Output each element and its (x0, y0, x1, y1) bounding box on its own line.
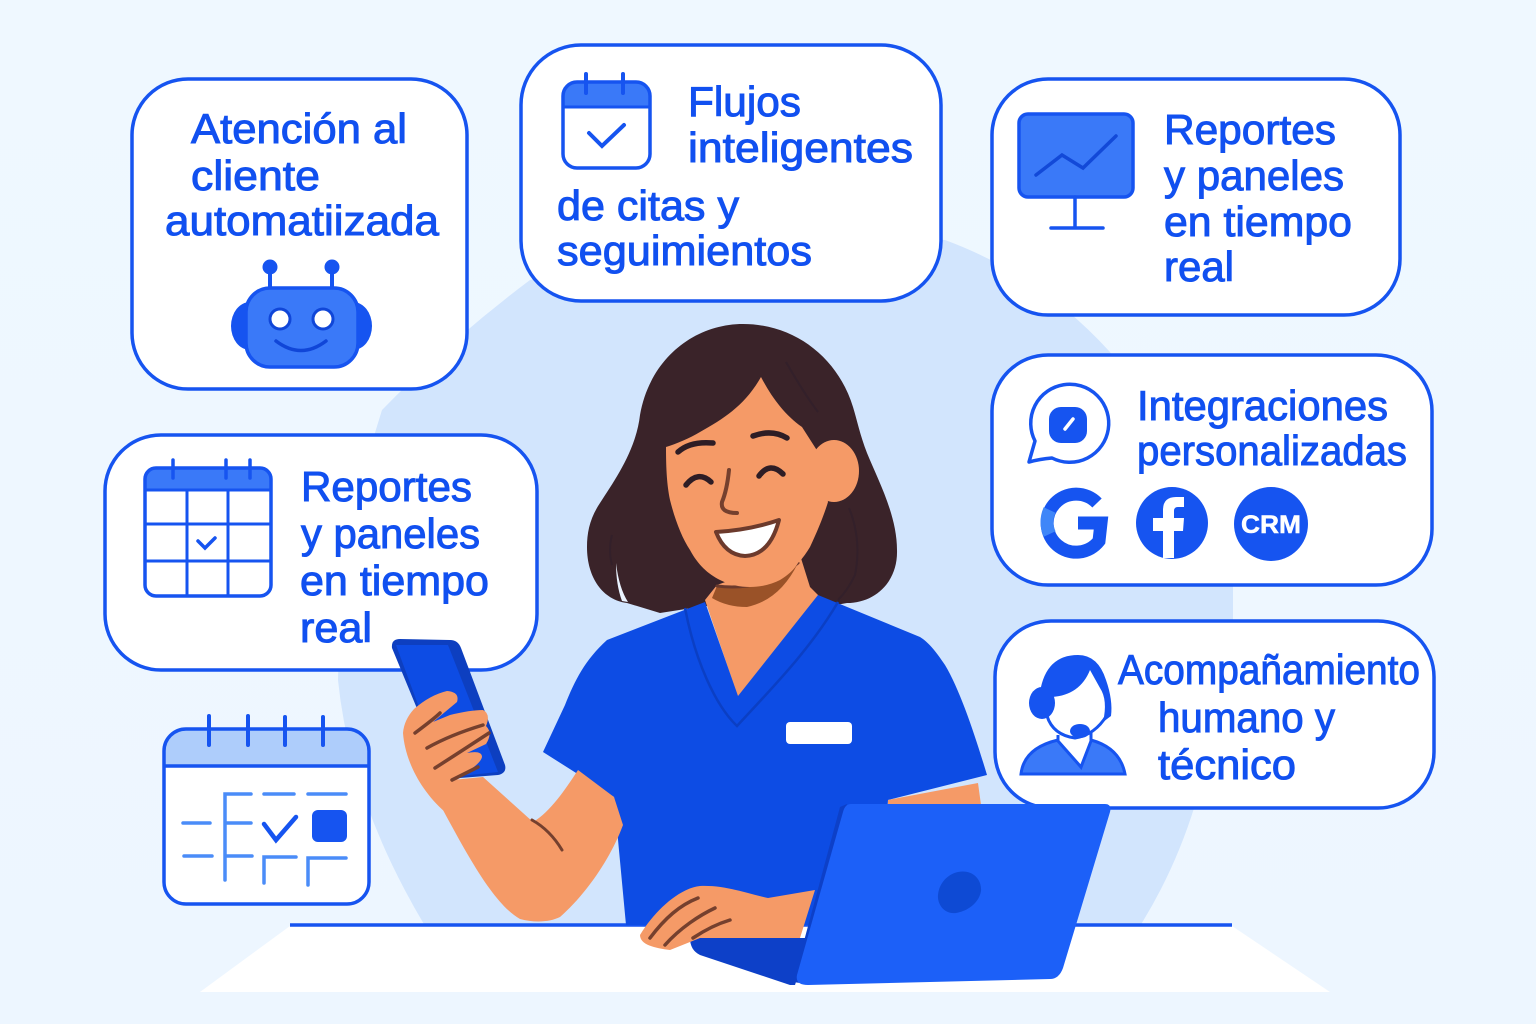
hair strands (610, 362, 857, 600)
right hand (640, 886, 815, 950)
card text: en tiempo (1164, 198, 1352, 245)
card text: Atención al (191, 105, 407, 152)
icon: chat bubble (1029, 384, 1109, 462)
card text (165, 105, 440, 244)
card text: seguimientos (557, 227, 812, 274)
icon: robot (231, 260, 372, 367)
card text: Reportes (1164, 106, 1336, 153)
card text (1137, 382, 1407, 474)
icon: google (1047, 494, 1101, 552)
icon: CRM (1234, 487, 1308, 561)
phone (392, 639, 505, 778)
card text (1164, 106, 1352, 290)
icon: CRM: CRM (1241, 511, 1301, 539)
icon: calendar check (563, 74, 650, 168)
card text: y paneles (301, 510, 480, 557)
card text: de citas y (557, 182, 739, 229)
card text: real (300, 604, 372, 651)
card text: Reportes (301, 463, 472, 510)
person (392, 324, 987, 925)
shirt (543, 595, 987, 925)
card: integraciones (992, 355, 1432, 585)
card text: cliente (191, 152, 320, 199)
card text: Acompañamiento (1118, 646, 1420, 693)
hand holding phone (403, 691, 490, 812)
card text (557, 78, 913, 274)
card text: y paneles (1164, 152, 1344, 199)
card text (1118, 646, 1420, 788)
laptop (640, 804, 1110, 985)
name badge (786, 722, 852, 744)
nose (722, 470, 737, 513)
icon: facebook (1136, 487, 1208, 559)
card: atención al cliente (132, 79, 467, 389)
card text (300, 463, 489, 651)
card text: en tiempo (300, 557, 489, 604)
hair highlight sliver (616, 563, 628, 602)
icon: monitor chart (1019, 114, 1133, 228)
card text: personalizadas (1137, 427, 1407, 474)
smile (716, 520, 779, 556)
face (666, 377, 828, 587)
icon: support agent (1021, 655, 1125, 774)
table (200, 925, 1330, 992)
card text: Integraciones (1137, 382, 1388, 429)
neck (705, 555, 820, 697)
card text: humano y (1158, 694, 1335, 741)
card text: Flujos (688, 78, 801, 125)
card: reportes left (105, 435, 537, 670)
hair (587, 324, 897, 613)
background blob (338, 232, 1233, 926)
right forearm background (888, 783, 981, 805)
left arm (440, 770, 623, 921)
card text: técnico (1158, 741, 1296, 788)
icon: calendar grid (145, 460, 271, 596)
card text: real (1164, 243, 1234, 290)
icon: large calendar (164, 716, 369, 904)
card text: automatiizada (165, 197, 440, 244)
ear (809, 440, 859, 502)
card: reportes top right (992, 79, 1400, 315)
card: acompañamiento (995, 621, 1434, 808)
eyes and brows (678, 433, 787, 485)
card: flujos inteligentes (521, 45, 941, 301)
card text: inteligentes (688, 124, 913, 171)
